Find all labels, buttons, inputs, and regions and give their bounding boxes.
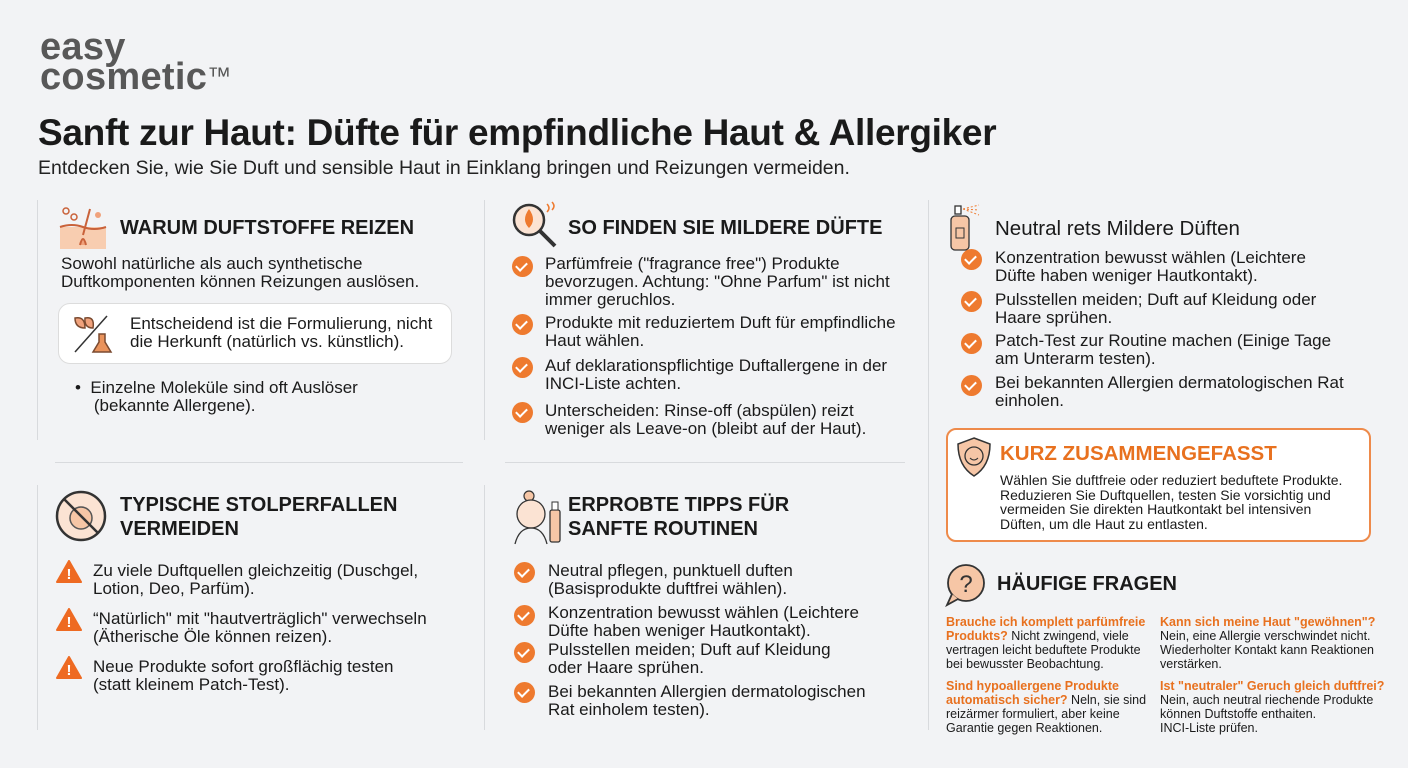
- check list: Bei bekannten Allergien dermatologischen: [548, 682, 866, 701]
- check list: Haare sprühen.: [995, 308, 1112, 327]
- check list: Rat einholem testen).: [548, 700, 710, 719]
- check list: (Basisprodukte duftfrei wählen).: [548, 579, 787, 598]
- panel: häufige fragen: [945, 564, 1384, 735]
- icon: skin: [60, 207, 106, 249]
- heading: KURZ ZUSAMMENGEFASST: [1000, 442, 1277, 465]
- check list: weniger als Leave-on (bleibt auf der Haut).: [545, 419, 866, 438]
- check list: [512, 254, 896, 438]
- check list: Parfümfreie ("fragrance free") Produkte: [545, 254, 840, 273]
- faq 4: [1160, 679, 1384, 735]
- panel: warum duftstoffe reizen: [58, 207, 452, 415]
- check list: oder Haare sprühen.: [548, 658, 704, 677]
- heading: SO FINDEN SIE MILDERE DÜFTE: [568, 217, 882, 239]
- text: Reduzieren Sie Duftquellen, testen Sie vorsichtig und: [1000, 486, 1331, 502]
- logo: [40, 26, 231, 98]
- check list: Bei bekannten Allergien dermatologischen Rat: [995, 373, 1344, 392]
- icon: leaf flask: [74, 316, 112, 353]
- text: Wählen Sie duftfreie oder reduziert beduftete Produkte.: [1000, 472, 1342, 488]
- logo: easy: [40, 26, 126, 68]
- faq 1: Produkts? Nicht zwingend, viele: [946, 629, 1129, 643]
- check list: immer geruchlos.: [545, 290, 675, 309]
- warning items: (Ätherische Öle können reizen).: [93, 627, 332, 646]
- faq 2: verstärken.: [1160, 657, 1222, 671]
- warning items: Lotion, Deo, Parfüm).: [93, 579, 255, 598]
- faq 3: reizärmer formuliert, aber keine: [946, 707, 1120, 721]
- panel: neutral rets mildere düften: [950, 204, 1344, 410]
- check list: Auf deklarationspflichtige Duftallergene in der: [545, 356, 887, 375]
- text: Duftkomponenten können Reizungen auslösen.: [61, 272, 419, 291]
- heading: WARUM DUFTSTOFFE REIZEN: [120, 217, 414, 239]
- heading: VERMEIDEN: [120, 518, 239, 540]
- text: [1000, 472, 1342, 532]
- check list: am Unterarm testen).: [995, 349, 1156, 368]
- icon: magnifier drop: [512, 202, 556, 248]
- faq 2: Kann sich meine Haut "gewöhnen"?: [1160, 615, 1375, 629]
- check list: Düfte haben weniger Hautkontakt).: [995, 266, 1258, 285]
- title: Sanft zur Haut: Düfte für empfindliche Haut & Allergiker: [38, 112, 996, 153]
- faq 3: [946, 679, 1146, 735]
- icon: no symbol: [56, 490, 106, 542]
- check list: Unterscheiden: Rinse-off (abspülen) reizt: [545, 401, 854, 420]
- warning items: Neue Produkte sofort großflächig testen: [93, 657, 394, 676]
- check list: INCI-Liste achten.: [545, 374, 681, 393]
- faq 3: Sind hypoallergene Produkte: [946, 679, 1119, 693]
- bullet: • Einzelne Moleküle sind oft Auslöser: [75, 378, 358, 397]
- faq 1: vertragen leicht beduftete Produkte: [946, 643, 1141, 657]
- faq 4: Ist "neutraler" Geruch gleich duftfrei?: [1160, 679, 1384, 693]
- logo: cosmetic™: [40, 56, 231, 98]
- panel: so finden sie mildere düfte: [512, 202, 896, 438]
- faq 3: Garantie gegen Reaktionen.: [946, 721, 1102, 735]
- warning items: “Natürlich" mit "hautverträglich" verwechseln: [93, 609, 427, 628]
- warning items: !: [66, 662, 72, 679]
- warning items: [56, 560, 427, 694]
- warning items: Zu viele Duftquellen gleichzeitig (Duschgel,: [93, 561, 418, 580]
- panel: erprobte tipps: [514, 490, 866, 719]
- bullet: (bekannte Allergene).: [94, 396, 256, 415]
- icon: question bubble: [945, 564, 985, 607]
- check list: [514, 561, 866, 719]
- text: die Herkunft (natürlich vs. künstlich).: [130, 332, 404, 351]
- icon: face with bottle: [514, 490, 561, 544]
- check list: einholen.: [995, 391, 1064, 410]
- heading: [120, 494, 397, 540]
- check list: [961, 248, 1344, 410]
- check list: bevorzugen. Achtung: "Ohne Parfum" ist nicht: [545, 272, 890, 291]
- warning items: !: [66, 614, 72, 631]
- faq 4: können Duftstoffe enthaiten.: [1160, 707, 1316, 721]
- icon: question bubble: ?: [959, 571, 973, 598]
- faq 4: INCI-Liste prüfen.: [1160, 721, 1258, 735]
- icon: spray bottle: [950, 204, 980, 251]
- faq 1: Brauche ich komplett parfümfreie: [946, 615, 1145, 629]
- faq 1: bei bewusster Beobachtung.: [946, 657, 1104, 671]
- heading: TYPISCHE STOLPERFALLEN: [120, 494, 397, 516]
- check list: Düfte haben weniger Hautkontakt).: [548, 621, 811, 640]
- text: Entscheidend ist die Formulierung, nicht: [130, 314, 432, 333]
- check list: Patch-Test zur Routine machen (Einige Tage: [995, 331, 1331, 350]
- faq 1: [946, 615, 1145, 671]
- check list: Haut wählen.: [545, 331, 644, 350]
- heading: [568, 493, 789, 540]
- faq 2: Nein, eine Allergie verschwindet nicht.: [1160, 629, 1371, 643]
- warning items: !: [66, 566, 72, 583]
- bullet: [75, 378, 358, 415]
- faq 2: [1160, 615, 1375, 671]
- check list: Neutral pflegen, punktuell duften: [548, 561, 793, 580]
- faq 4: Nein, auch neutral riechende Produkte: [1160, 693, 1373, 707]
- callout: kurz zusammengefasst: [946, 428, 1371, 542]
- heading: HÄUFIGE FRAGEN: [997, 573, 1177, 595]
- callout box: [58, 303, 452, 364]
- check list: Konzentration bewusst wählen (Leichtere: [995, 248, 1306, 267]
- subtitle: Entdecken Sie, wie Sie Duft und sensible Haut in Einklang bringen und Reizungen vermeiden.: [38, 157, 850, 179]
- check list: Konzentration bewusst wählen (Leichtere: [548, 603, 859, 622]
- text: vermeiden Sie direkten Hautkontakt bel intensiven: [1000, 501, 1311, 517]
- warning items: (statt kleinem Patch-Test).: [93, 675, 290, 694]
- faq 2: Wiederholter Kontakt kann Reaktionen: [1160, 643, 1374, 657]
- check list: Produkte mit reduziertem Duft für empfindliche: [545, 313, 896, 332]
- text: [61, 254, 419, 291]
- check list: Pulsstellen meiden; Duft auf Kleidung oder: [995, 290, 1316, 309]
- icon: shield smile: [957, 437, 991, 477]
- faq 3: automatisch sicher? Neln, sie sind: [946, 693, 1146, 707]
- panel: stolperfallen: [56, 490, 427, 694]
- text: Düften, um dle Haut zu entlasten.: [1000, 516, 1208, 532]
- text: Sowohl natürliche als auch synthetische: [61, 254, 362, 273]
- check list: Pulsstellen meiden; Duft auf Kleidung: [548, 640, 831, 659]
- heading: Neutral rets Mildere Düften: [995, 217, 1240, 240]
- text: [130, 314, 432, 351]
- heading: SANFTE ROUTINEN: [568, 518, 758, 540]
- heading: ERPROBTE TIPPS FÜR: [568, 494, 789, 516]
